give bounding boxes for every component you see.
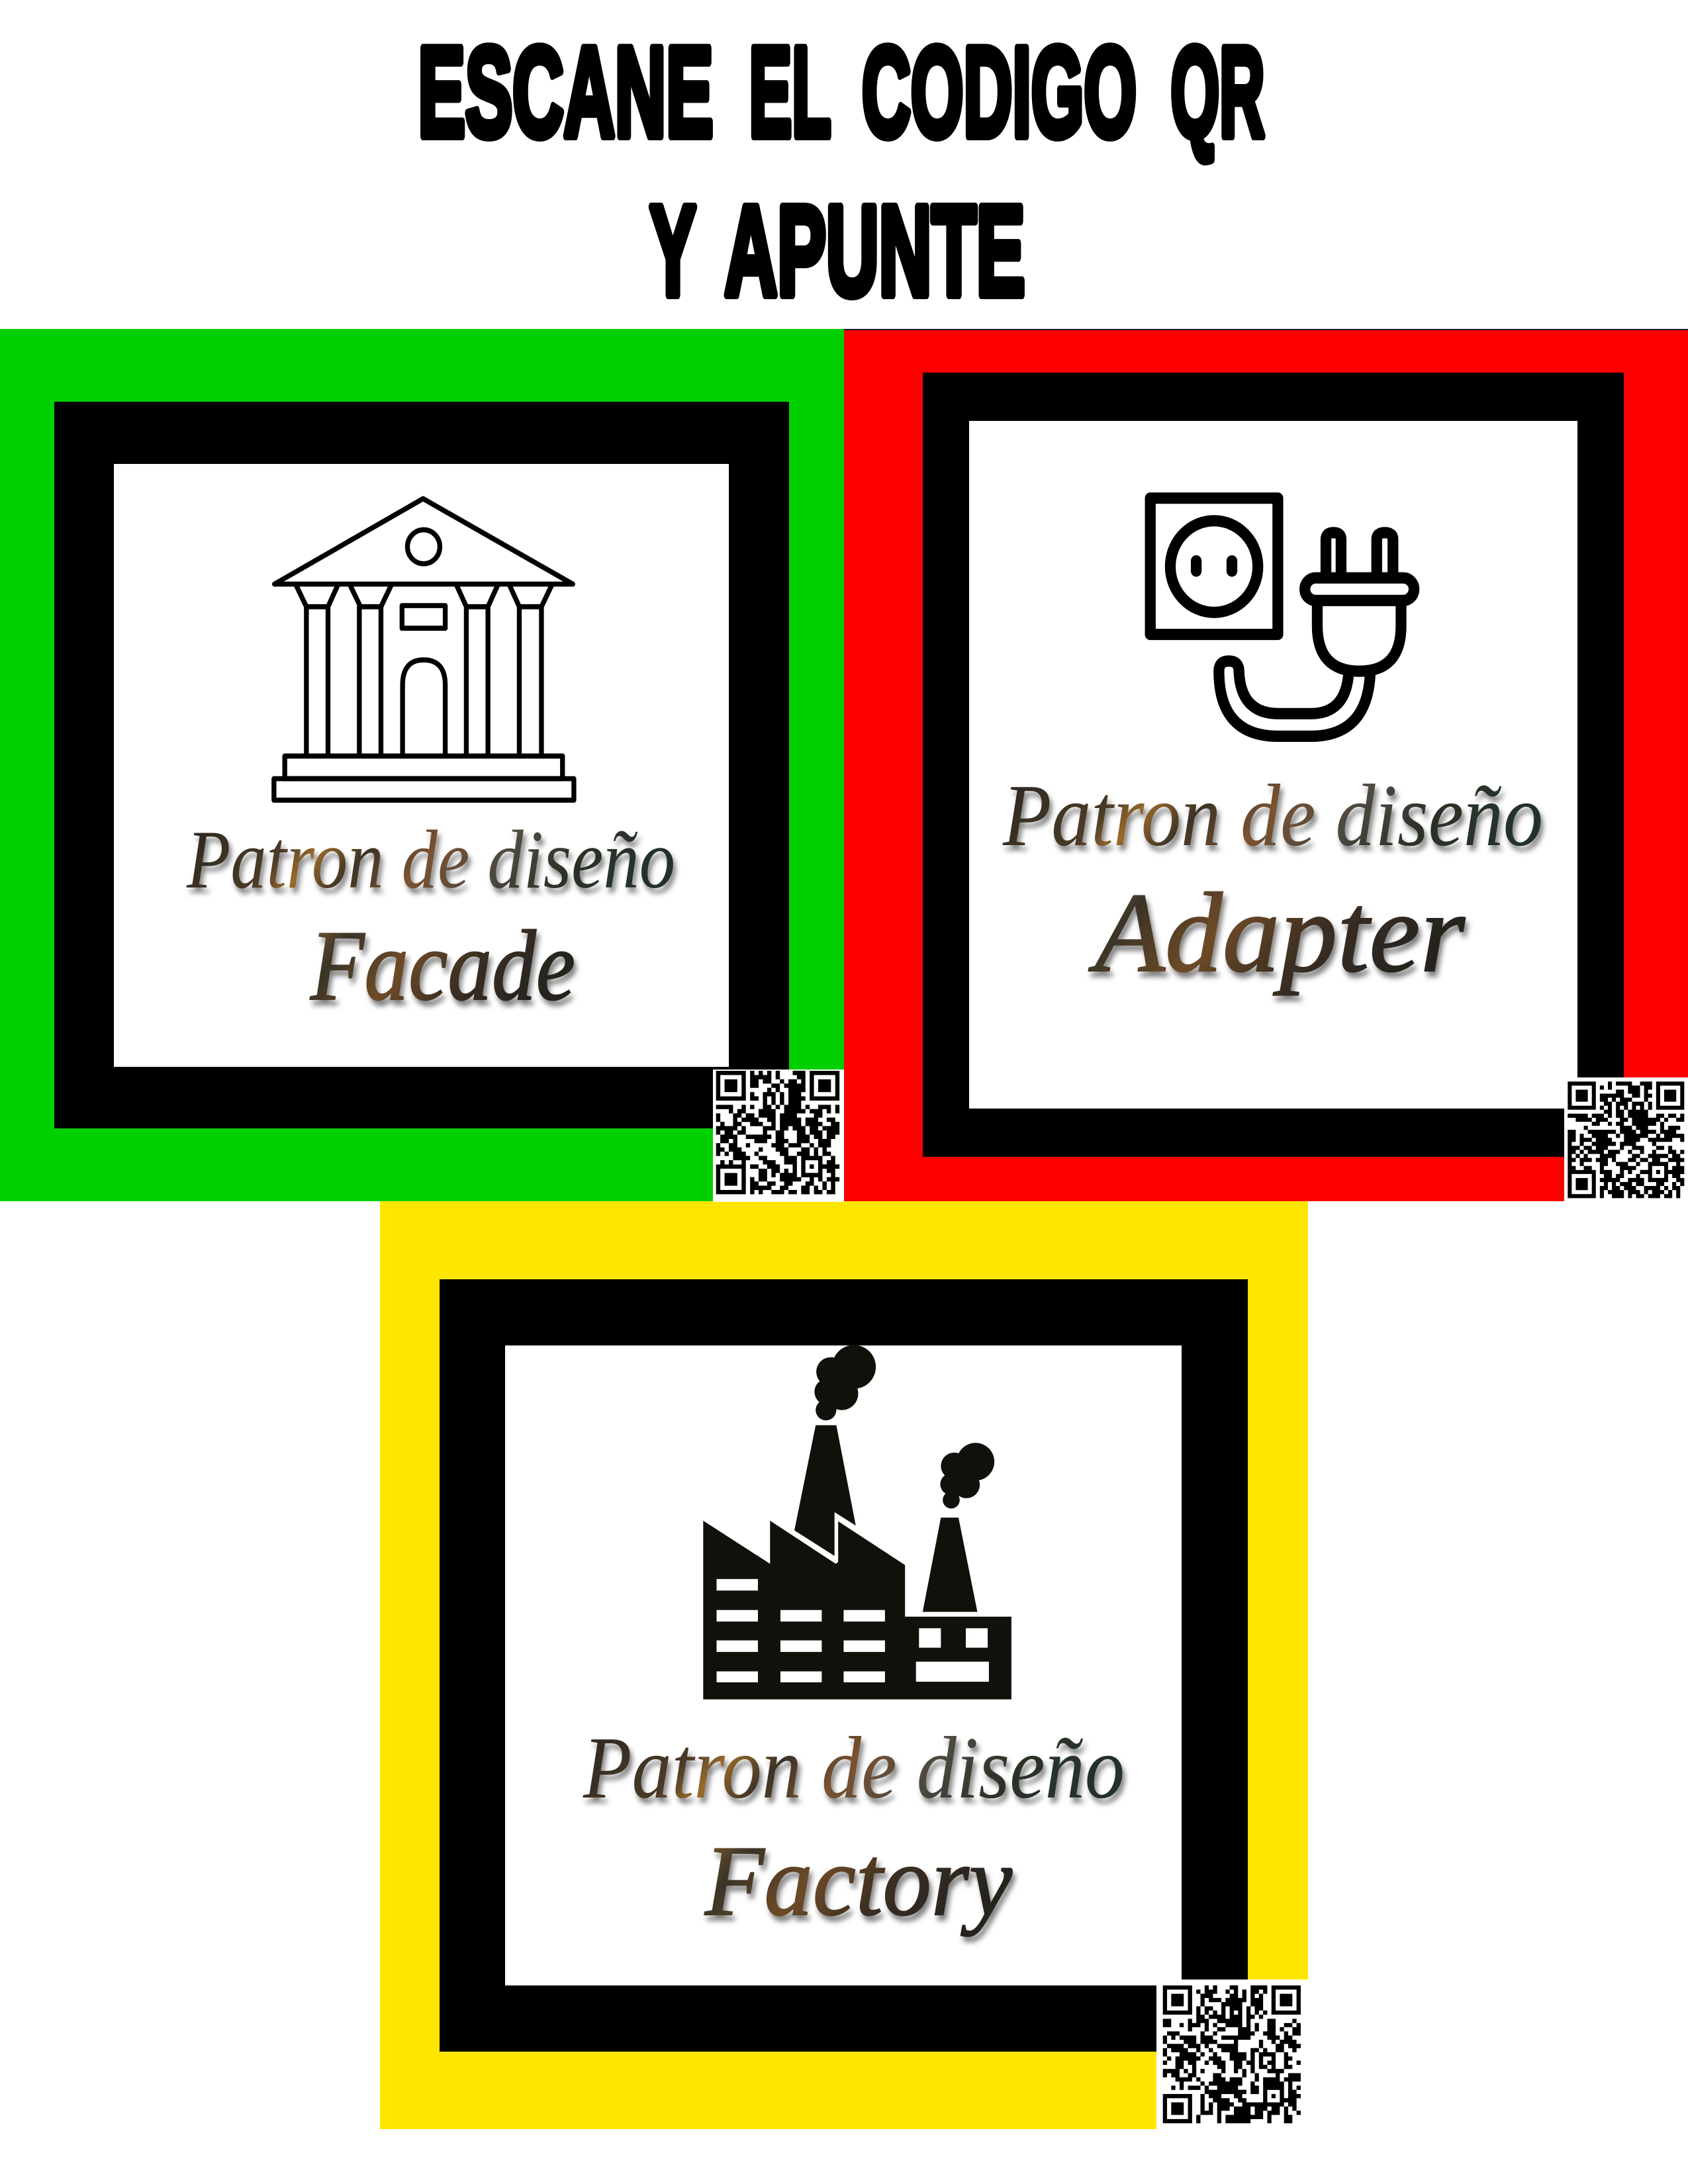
text: adapter: Adapter: [1088, 870, 1466, 996]
icon: classical building: [274, 499, 574, 800]
frame: black border: [923, 373, 1624, 1157]
title: EL: [749, 20, 831, 163]
text: patron de diseno: Patron de diseño: [583, 1719, 1125, 1817]
frame: black border: [440, 1279, 1248, 2052]
panel: facade (green): [0, 329, 844, 1202]
icon: factory: [703, 1345, 1011, 1700]
panel: factory (yellow): [380, 1201, 1308, 2129]
text: factory: Factory: [704, 1825, 1013, 1936]
title: Y: [650, 179, 696, 322]
QR code: adapter: [1564, 1077, 1688, 1201]
title: [418, 20, 1264, 322]
icon: socket and plug: [1150, 498, 1414, 736]
content card: [114, 464, 729, 1067]
text: facade: Facade: [310, 910, 575, 1021]
title: CODIGO: [862, 20, 1137, 163]
text: patron de diseno: Patron de diseño: [186, 814, 675, 906]
title: APUNTE: [724, 179, 1025, 322]
panel: adapter (red): [844, 329, 1688, 1201]
content card: [969, 421, 1577, 1109]
content card: [505, 1345, 1182, 1985]
title: ESCANE: [418, 20, 714, 163]
text: patron de diseno: Patron de diseño: [1002, 766, 1543, 864]
frame: black border: [54, 402, 789, 1128]
QR code: facade: [713, 1069, 844, 1202]
text: QR: [1170, 20, 1264, 163]
QR code: factory: [1156, 1979, 1308, 2130]
